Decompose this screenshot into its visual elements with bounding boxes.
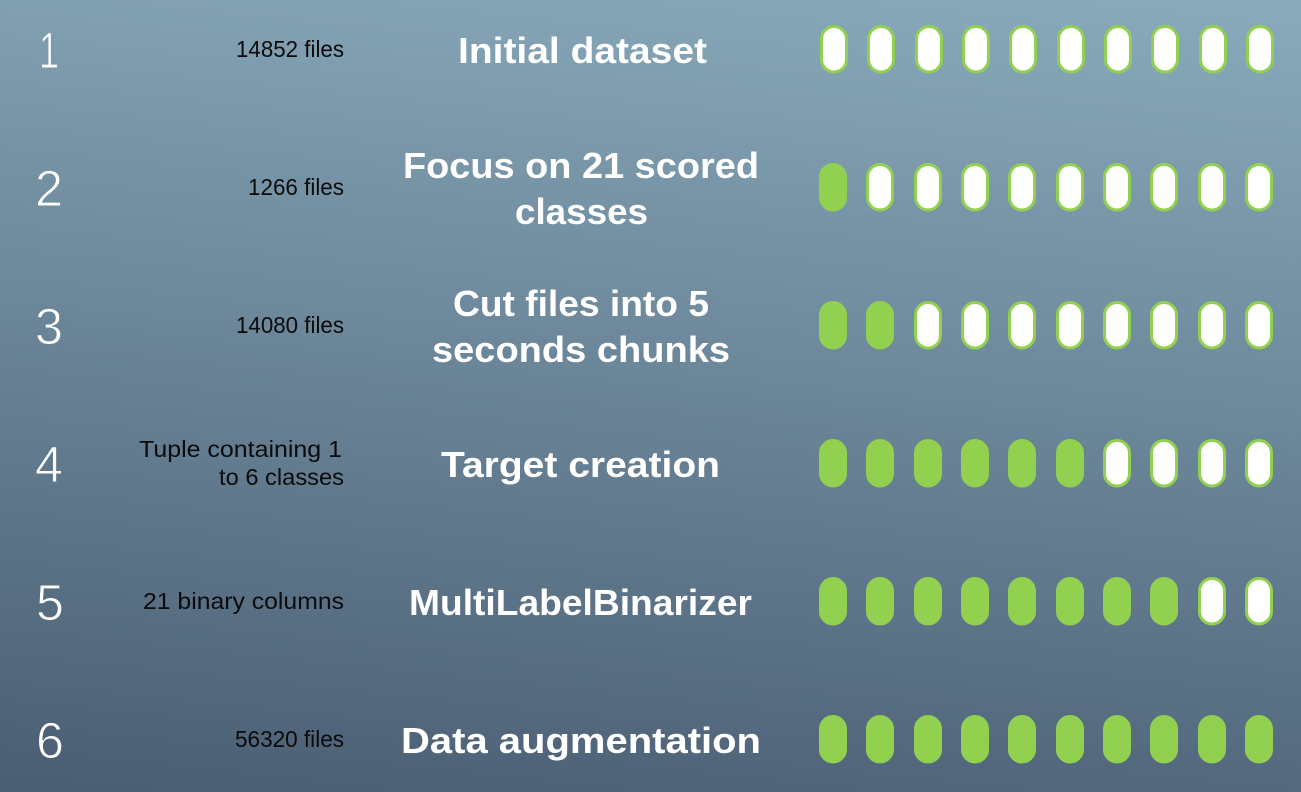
step title: Target creation: Target creation: [441, 444, 720, 485]
step title: Initial dataset: Initial dataset: [458, 30, 707, 71]
progress pills: 2 of 10 filled: [820, 302, 1272, 348]
step 3 row: [35, 283, 1272, 370]
progress pills: 8 of 10 filled: [820, 578, 1272, 624]
step 1 row: [39, 22, 1272, 79]
description: Tuple containing 1 to 6 classes: Tuple containing 1: [139, 436, 342, 462]
file count: 1266 files: 1266 files: [248, 174, 344, 200]
progress pills: 6 of 10 filled: [820, 440, 1272, 486]
progress pills: 10 of 10 filled: [820, 716, 1272, 762]
step title: Focus on 21 scored classes: Focus on 21 scored: [403, 145, 759, 186]
file count: 14852 files: 14852 files: [236, 36, 344, 62]
step title: Cut files into 5 seconds chunks: seconds chunks: [432, 329, 730, 370]
step title: Focus on 21 scored classes: classes: [515, 191, 648, 232]
file count: 56320 files: 56320 files: [235, 726, 344, 752]
step number 6: 6: [36, 712, 64, 769]
step title: Cut files into 5 seconds chunks: [432, 283, 730, 370]
step 4 row: [35, 436, 1272, 493]
file count: 14080 files: 14080 files: [236, 312, 344, 338]
step title: Data augmentation: Data augmentation: [401, 720, 761, 761]
step number 1: 1: [39, 22, 59, 79]
step 5 row: [36, 574, 1272, 631]
step 2 row: [35, 145, 1272, 232]
step number 3: 3: [35, 298, 63, 355]
description: Tuple containing 1 to 6 classes: [139, 436, 344, 490]
step number 5: 5: [36, 574, 64, 631]
step title: Focus on 21 scored classes: [403, 145, 759, 232]
progress pills: 0 of 10 filled: [822, 26, 1272, 72]
step number 2: 2: [35, 160, 63, 217]
step number 4: 4: [35, 436, 63, 493]
step title: Cut files into 5 seconds chunks: Cut files into 5: [453, 283, 709, 324]
description: 21 binary columns: 21 binary columns: [143, 588, 344, 614]
description: Tuple containing 1 to 6 classes: to 6 classes: [219, 464, 344, 490]
progress pills: 1 of 10 filled: [820, 164, 1272, 210]
step title: MultiLabelBinarizer: MultiLabelBinarizer: [409, 582, 752, 623]
step 6 row: [36, 712, 1272, 769]
